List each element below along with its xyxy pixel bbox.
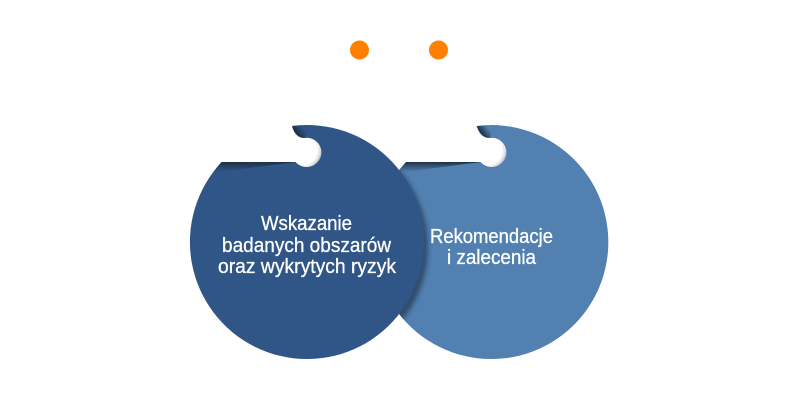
- label: recommendations: Rekomendacje: [430, 226, 553, 248]
- notch shadow: [292, 125, 306, 138]
- label: surveyed areas: oraz wykrytych ryzyk: [218, 256, 397, 278]
- label: surveyed areas: badanych obszarów: [222, 235, 392, 257]
- hole shading: [292, 138, 321, 167]
- band shadow under cut: [400, 162, 480, 171]
- band shadow under cut: [214, 162, 296, 170]
- notch shadow: [477, 125, 492, 138]
- cast shadow from left circle: [399, 168, 430, 320]
- label: surveyed areas: Wskazanie: [261, 213, 352, 235]
- panel: right circle: [399, 125, 608, 359]
- circle body: dark blue: [190, 125, 424, 359]
- circle body: light blue: [374, 125, 608, 359]
- dot: right orange: [429, 40, 448, 60]
- label: recommendations: i zalecenia: [447, 247, 537, 269]
- dot: left orange: [350, 40, 369, 60]
- decorative dots: [350, 40, 448, 60]
- hole shading: [477, 138, 506, 167]
- panel: left circle: [190, 125, 424, 359]
